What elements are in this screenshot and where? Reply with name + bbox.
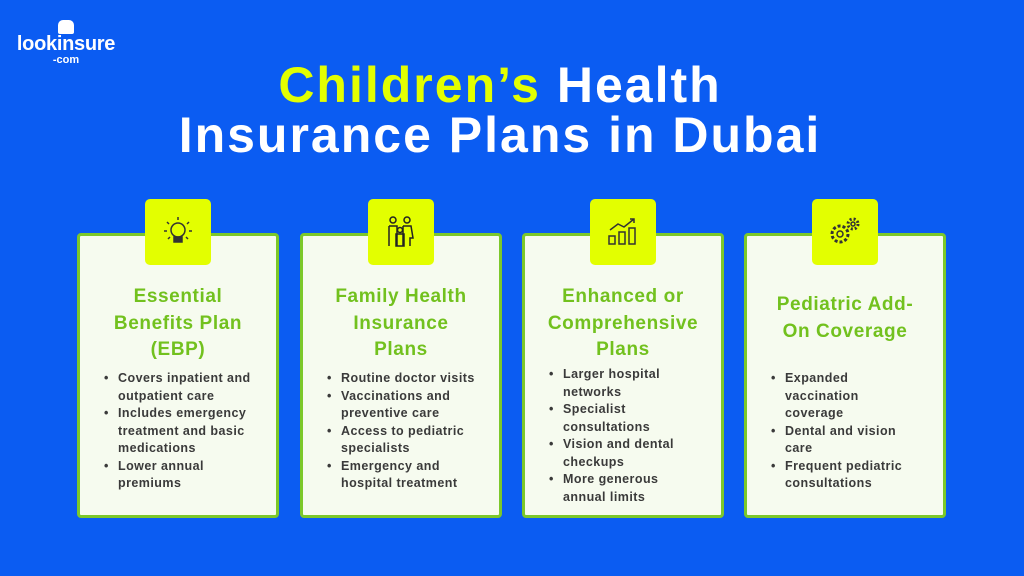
panel: EBP bbox=[77, 233, 279, 518]
panel: EBP: Covers inpatient and outpatient care bbox=[118, 371, 251, 402]
panel: enhanced: Enhanced or bbox=[562, 286, 684, 307]
panel: enhanced: Vision and dental checkups bbox=[563, 437, 674, 468]
panel: pediatric: Expanded vaccination coverage bbox=[785, 371, 859, 420]
panel: family: Family Health bbox=[335, 286, 467, 307]
panel: EBP: Lower annual premiums bbox=[118, 458, 204, 490]
icon: chart bbox=[590, 199, 656, 265]
panel: EBP: Benefits Plan bbox=[114, 312, 242, 334]
panel: pediatric: Pediatric Add- bbox=[777, 294, 913, 315]
icon: family bbox=[368, 199, 434, 265]
title: Children’s Health bbox=[278, 57, 722, 113]
logo: lookinsure bbox=[17, 33, 115, 55]
panel: pediatric: On Coverage bbox=[783, 320, 907, 342]
icon: bulb bbox=[145, 199, 211, 265]
panel: enhanced: Plans bbox=[596, 339, 650, 360]
panel: enhanced: Comprehensive bbox=[548, 312, 698, 334]
panel: pediatric: Dental and vision care bbox=[785, 424, 896, 455]
logo: -com bbox=[53, 54, 79, 66]
panel: enhanced: Larger hospital networks bbox=[563, 367, 660, 398]
panel: enhanced: More generous annual limits bbox=[563, 472, 658, 504]
panel: EBP: Essential bbox=[134, 286, 222, 307]
panel: pediatric: Frequent pediatric consultations bbox=[785, 458, 902, 490]
panel: family: Access to pediatric specialists bbox=[341, 424, 464, 455]
panel: family: Emergency and hospital treatment bbox=[341, 458, 457, 490]
panel: family: Vaccinations and preventive care bbox=[341, 388, 450, 420]
panel: family: Routine doctor visits bbox=[341, 371, 475, 385]
panel: enhanced bbox=[522, 233, 724, 518]
panel: enhanced: Specialist consultations bbox=[563, 402, 650, 434]
panel: EBP: (EBP) bbox=[151, 339, 205, 360]
panel: pediatric bbox=[744, 233, 946, 518]
panel: EBP: Includes emergency treatment and basic medications bbox=[118, 406, 246, 455]
panel: family: Insurance bbox=[353, 312, 449, 334]
icon: owl bbox=[58, 20, 74, 34]
title bbox=[179, 57, 821, 163]
logo bbox=[17, 20, 115, 66]
icon: gears bbox=[812, 199, 878, 265]
panel: family: Plans bbox=[374, 339, 428, 360]
title: Insurance Plans in Dubai bbox=[179, 107, 821, 163]
panel: family bbox=[300, 233, 502, 518]
